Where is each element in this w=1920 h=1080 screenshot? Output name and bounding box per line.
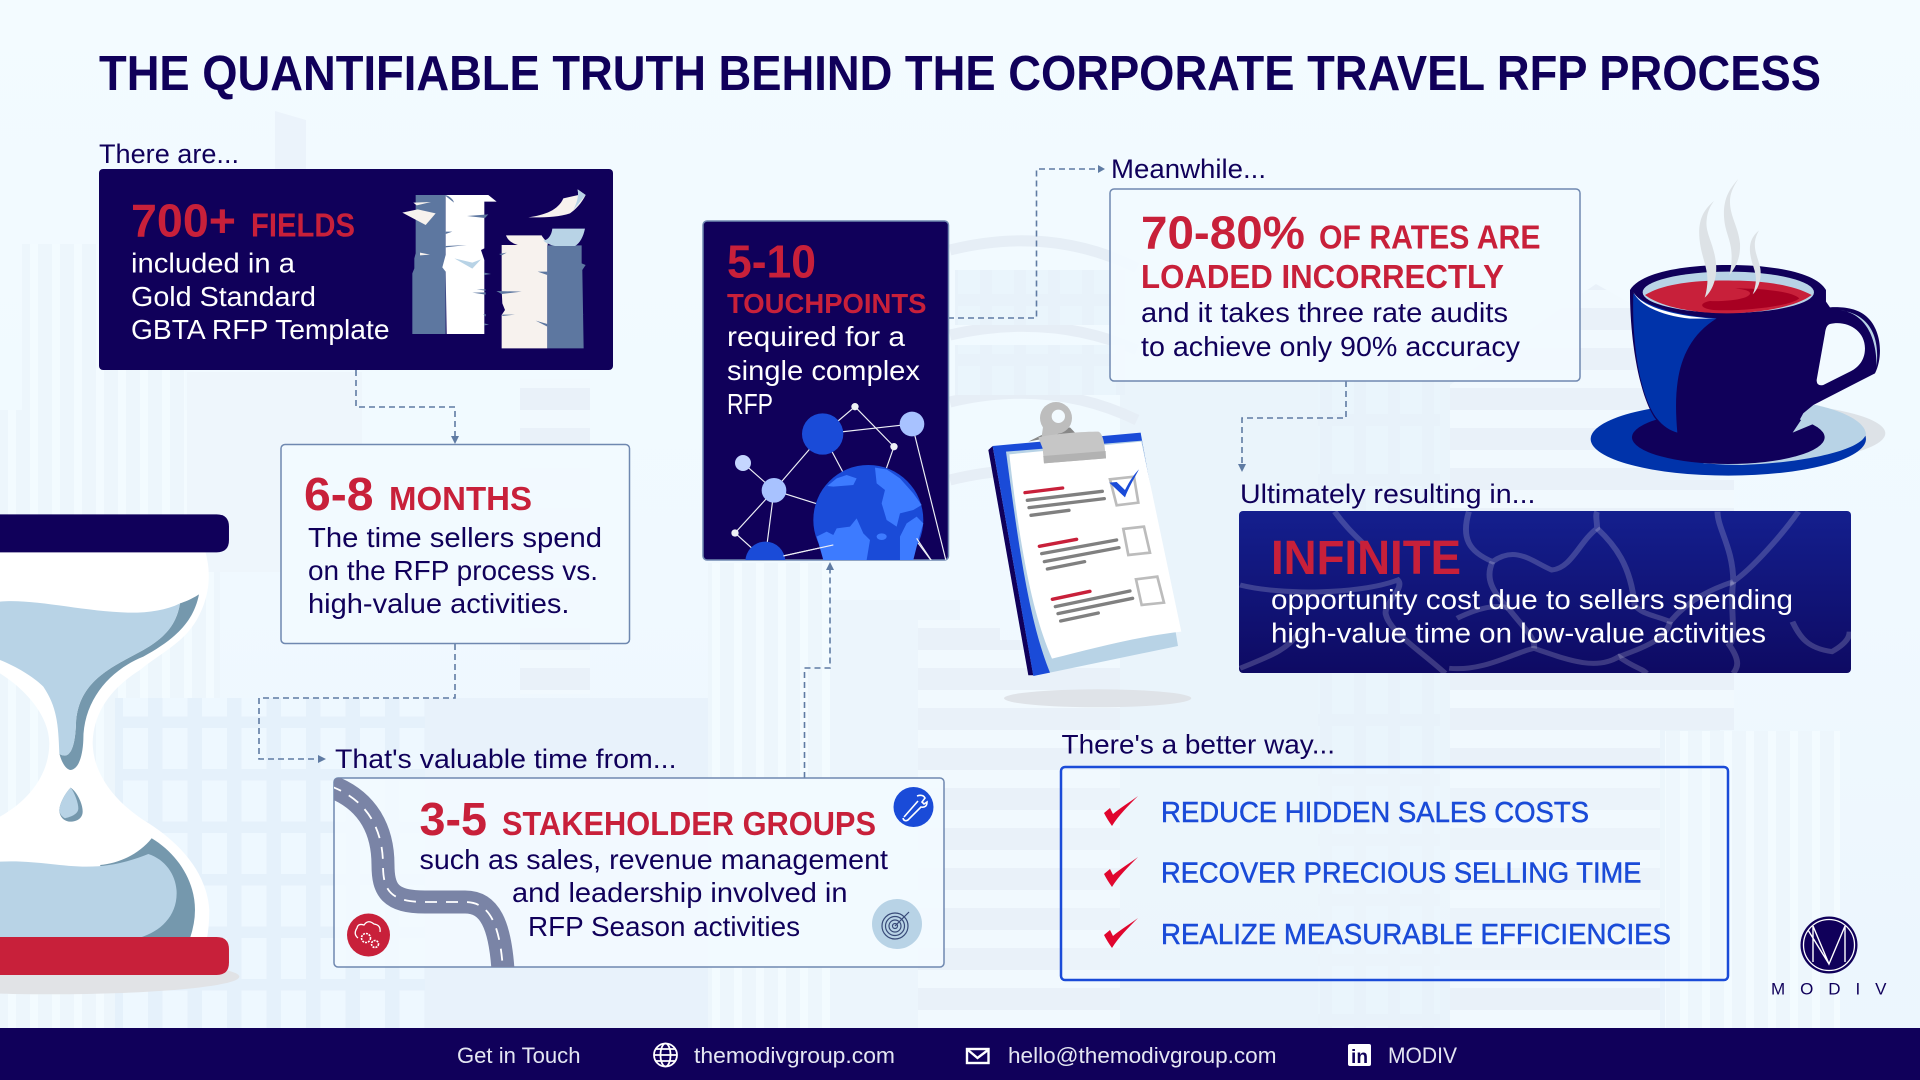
label: valuable time: That's valuable time from...	[335, 744, 676, 774]
description: high-value time on low-value activities	[1271, 618, 1766, 648]
benefit: realize measurable efficiencies: REALIZE MEASURABLE EFFICIENCIES	[1161, 919, 1671, 951]
footer: LinkedIn	[1348, 1043, 1457, 1068]
panel: 6-8 months	[281, 444, 630, 644]
icon: target	[872, 899, 922, 949]
label: better way: There's a better way...	[1062, 730, 1335, 760]
label: meanwhile: Meanwhile...	[1111, 154, 1266, 184]
title: THE QUANTIFIABLE TRUTH BEHIND THE CORPORATE TRAVEL RFP PROCESS	[99, 47, 1821, 101]
hourglass top bar	[0, 514, 229, 552]
panel: 700+ fields	[99, 169, 613, 370]
description: such as sales, revenue management	[420, 844, 888, 875]
stat: 5-10 touchpoints	[727, 236, 926, 319]
label: ultimately resulting in: Ultimately resulting in...	[1240, 479, 1536, 509]
description: opportunity cost due to sellers spending	[1271, 584, 1793, 615]
road illustration	[330, 786, 503, 970]
stat: 6-8 months: MONTHS	[389, 480, 532, 517]
description	[131, 248, 390, 345]
description: high-value activities.	[308, 588, 570, 619]
icon: cloud gears	[347, 914, 390, 956]
description: RFP Season activities	[528, 911, 800, 942]
description: included in a	[131, 248, 295, 278]
description: on the RFP process vs.	[308, 555, 598, 586]
stat: 70-80% of rates are loaded incorrectly: LOADED INCORRECTLY	[1141, 258, 1504, 295]
description	[727, 321, 920, 421]
stat: 70-80% of rates are loaded incorrectly	[1141, 206, 1540, 295]
icon: hourglass	[0, 514, 239, 994]
stat: 3-5 stakeholder groups	[420, 793, 876, 845]
icon: wrench	[894, 787, 934, 827]
description: and it takes three rate audits	[1141, 297, 1508, 328]
benefit: recover precious selling time: RECOVER PRECIOUS SELLING TIME	[1161, 858, 1642, 890]
panel: benefits checklist	[1061, 767, 1728, 980]
stat: 70-80% of rates are loaded incorrectly: OF RATES ARE	[1319, 218, 1540, 256]
footer bar	[0, 1028, 1920, 1080]
icon: paper stacks	[402, 189, 586, 348]
description	[420, 844, 888, 942]
description	[1141, 297, 1520, 362]
description: RFP	[727, 389, 773, 421]
icon: coffee cup	[1591, 179, 1885, 476]
stat: 700+ fields	[131, 194, 355, 246]
stat: 3-5 stakeholder groups: 3-5	[420, 793, 487, 845]
footer: email: hello@themodivgroup.com	[1008, 1043, 1276, 1068]
description	[308, 522, 602, 619]
stat: 5-10 touchpoints: 5-10	[727, 236, 816, 288]
benefit: reduce hidden sales costs: REDUCE HIDDEN SALES COSTS	[1161, 797, 1589, 829]
stat: infinite: INFINITE	[1271, 532, 1461, 585]
stat: 6-8 months	[304, 468, 532, 520]
logo: Modiv: MODIV	[1771, 980, 1887, 998]
panel: 3-5 stakeholder groups	[330, 778, 944, 970]
description: Gold Standard	[131, 281, 316, 312]
connector arrows	[259, 165, 1346, 778]
label: there are: There are...	[99, 139, 239, 169]
panel: infinite opportunity cost	[1239, 511, 1851, 673]
decorative pattern	[1240, 512, 1850, 673]
footer: website: themodivgroup.com	[694, 1043, 895, 1068]
icon: network globe	[731, 403, 946, 560]
description: and leadership involved in	[512, 877, 848, 908]
logo: Modiv	[1771, 916, 1887, 998]
footer: LinkedIn: MODIV	[1388, 1043, 1457, 1068]
stat: 5-10 touchpoints: TOUCHPOINTS	[727, 288, 926, 319]
stat: 6-8 months: 6-8	[304, 468, 374, 520]
hourglass base bar	[0, 937, 229, 975]
description: to achieve only 90% accuracy	[1141, 331, 1520, 362]
description: single complex	[727, 355, 920, 386]
stat: 700+ fields: 700+	[131, 194, 236, 246]
description: required for a	[727, 321, 905, 352]
description	[1271, 584, 1793, 648]
description: GBTA RFP Template	[131, 314, 390, 345]
description: The time sellers spend	[308, 522, 602, 553]
icon: clipboard checklist	[988, 402, 1191, 707]
panel: 5-10 touchpoints	[703, 221, 948, 582]
stat: 70-80% of rates are loaded incorrectly: 70-80%	[1141, 206, 1305, 258]
footer: LinkedIn: in	[1351, 1047, 1368, 1068]
stat: 3-5 stakeholder groups: STAKEHOLDER GROUPS	[502, 805, 876, 842]
panel: 70-80% of rates	[1110, 189, 1580, 381]
footer: get in touch: Get in Touch	[457, 1043, 580, 1068]
stat: 700+ fields: FIELDS	[251, 206, 355, 244]
